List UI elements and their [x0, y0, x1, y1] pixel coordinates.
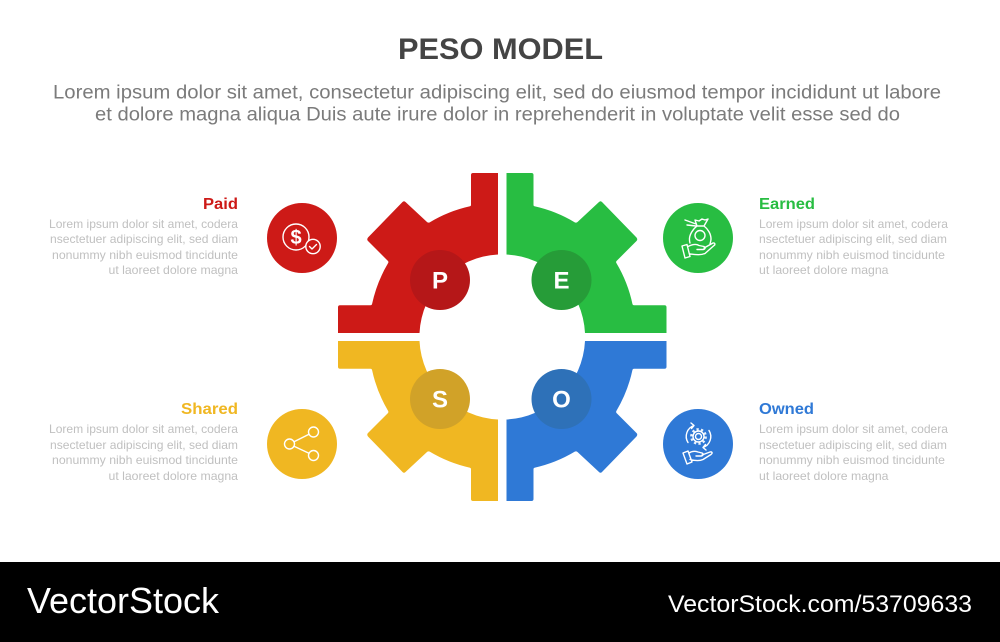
- text block: paid: Lorem ipsum dolor sit amet, codera: [49, 217, 238, 231]
- footer url: VectorStock.com/53709633: [668, 591, 972, 618]
- footer logo: VectorStock: [27, 580, 220, 621]
- gear segment: owned: [506, 341, 666, 501]
- subtitle text: [53, 82, 941, 126]
- icon: gear in hand: [663, 409, 733, 479]
- text block: paid: [49, 217, 238, 277]
- panel: owned: [663, 401, 948, 483]
- text block: shared: Lorem ipsum dolor sit amet, codera: [49, 422, 238, 436]
- heading: earned: Earned: [759, 196, 815, 213]
- letter badge: P: [410, 250, 470, 310]
- text block: shared: nonummy nibh euismod tincidunte: [52, 453, 238, 467]
- subtitle text: et dolore magna aliqua Duis aute irure dolor in reprehenderit in voluptate velit esse sed do: [95, 104, 900, 126]
- heading: shared: Shared: [181, 401, 238, 418]
- text block: earned: Lorem ipsum dolor sit amet, codera: [759, 217, 948, 231]
- text block: earned: nonummy nibh euismod tincidunte: [759, 248, 945, 262]
- panel: earned: [663, 196, 948, 277]
- icon: money with check: [267, 203, 337, 273]
- panel: shared: [49, 401, 337, 483]
- footer bar: [0, 562, 1000, 642]
- text block: owned: nonummy nibh euismod tincidunte: [759, 453, 945, 467]
- gear segment: earned: [506, 173, 666, 333]
- letter badge: P: P: [432, 268, 448, 294]
- letter badge: E: E: [553, 268, 570, 294]
- gear diagram: [338, 173, 666, 501]
- letter badge: S: S: [432, 386, 448, 414]
- letter badge: O: O: [552, 386, 571, 414]
- gear segment: shared: [338, 341, 498, 501]
- letter badge: S: [410, 369, 470, 429]
- text block: owned: [759, 422, 948, 483]
- text block: shared: ut laoreet dolore magna: [108, 469, 238, 483]
- text block: owned: Lorem ipsum dolor sit amet, codera: [759, 422, 948, 436]
- text block: earned: ut laoreet dolore magna: [759, 263, 889, 277]
- icon: money with check: $: [290, 227, 302, 249]
- subtitle text: Lorem ipsum dolor sit amet, consectetur adipiscing elit, sed do eiusmod tempor incididunt ut labore: [53, 82, 941, 104]
- title: PESO MODEL: [398, 33, 603, 66]
- text block: shared: [49, 422, 238, 483]
- heading: paid: Paid: [203, 196, 238, 213]
- letter badge: O: [532, 369, 592, 429]
- text block: paid: nonummy nibh euismod tincidunte: [52, 248, 238, 262]
- text block: owned: nsectetuer adipiscing elit, sed diam: [759, 438, 947, 452]
- letter badge: E: [532, 250, 592, 310]
- text block: paid: nsectetuer adipiscing elit, sed diam: [50, 232, 238, 246]
- gear segment: paid: [338, 173, 498, 333]
- text block: paid: ut laoreet dolore magna: [108, 263, 238, 277]
- text block: earned: nsectetuer adipiscing elit, sed diam: [759, 232, 947, 246]
- heading: owned: Owned: [759, 401, 814, 418]
- text block: shared: nsectetuer adipiscing elit, sed diam: [50, 438, 238, 452]
- text block: earned: [759, 217, 948, 277]
- icon: money bag in hand: [663, 203, 733, 273]
- panel: paid: [49, 196, 337, 277]
- icon: share nodes: [267, 409, 337, 479]
- text block: owned: ut laoreet dolore magna: [759, 469, 889, 483]
